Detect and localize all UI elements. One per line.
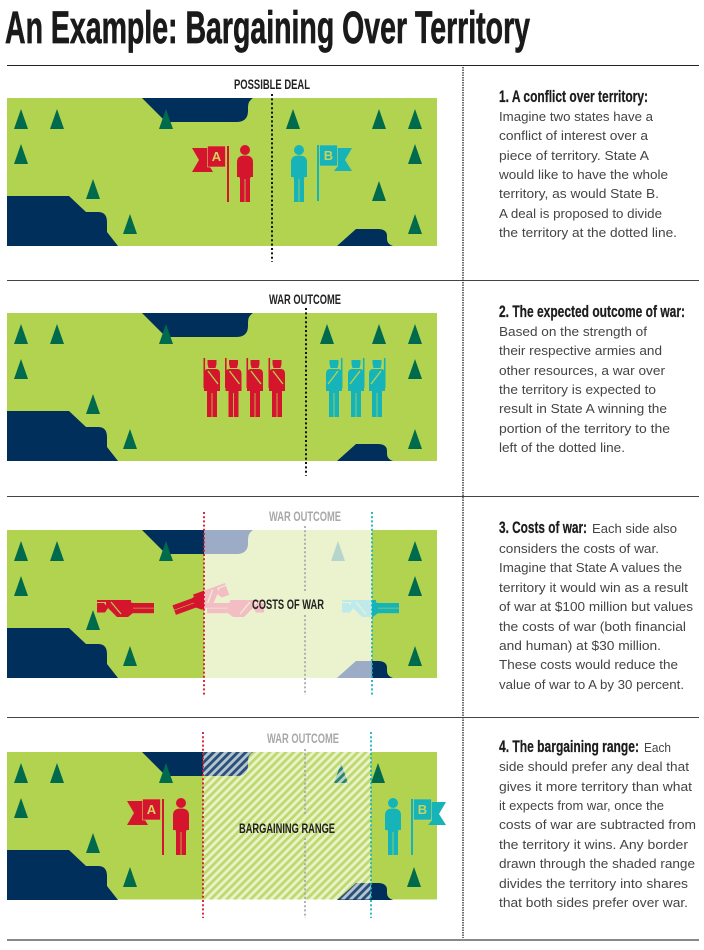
text block 4: costs of war are subtracted from <box>499 817 696 832</box>
map ground 3 <box>7 530 437 678</box>
text block 3: Imagine that State A values the <box>499 560 682 575</box>
flag A: A <box>212 149 222 164</box>
costs of war shaded range <box>204 530 372 678</box>
war outcome label: WAR OUTCOME <box>269 509 341 524</box>
text block 4: drawn through the shaded range <box>499 856 695 871</box>
text block 3: of war at $100 million but values <box>499 599 694 614</box>
text block 1: would like to have the whole <box>498 167 668 182</box>
trees 4 <box>14 763 421 887</box>
person B <box>385 798 401 855</box>
faded lakes inside range <box>204 530 372 678</box>
lakes 1 <box>7 98 393 246</box>
text block 1: conflict of interest over a <box>499 128 649 143</box>
trees 3 <box>14 541 422 666</box>
fallen soldiers <box>97 583 399 618</box>
text block 1: the territory at the dotted line. <box>499 225 677 240</box>
flag A <box>127 799 164 855</box>
text block 4 <box>499 737 696 910</box>
cyan soldiers <box>326 358 386 417</box>
text block 3: the costs of war (both financial <box>499 619 686 634</box>
cyan boundary <box>370 732 372 918</box>
flag A: A <box>147 802 157 817</box>
text block 1: territory, as would State B. <box>499 186 659 201</box>
lakes 3 <box>7 530 393 678</box>
bargaining range label: BARGAINING RANGE <box>239 821 335 836</box>
war outcome label: WAR OUTCOME <box>267 731 339 746</box>
map ground 2 <box>7 313 437 461</box>
text block 2: other resources, a war over <box>499 363 666 378</box>
text block 4: divides the territory into shares <box>499 876 689 891</box>
text block 1: 1. A conflict over territory: <box>499 87 648 106</box>
text block 3: 3. Costs of war: <box>499 518 587 537</box>
text block 4: Each <box>644 740 671 755</box>
lakes 4 <box>7 752 393 900</box>
panel 2: war outcome map <box>7 292 437 476</box>
map ground 1 <box>7 98 437 246</box>
possible deal dotted line <box>271 94 273 262</box>
text block 2: result in State A winning the <box>499 401 667 416</box>
war outcome dotted line <box>305 308 307 476</box>
text block 1 <box>498 87 677 240</box>
person B <box>291 145 307 202</box>
text block 2 <box>499 302 685 455</box>
flag B: B <box>418 802 427 817</box>
red soldiers <box>204 358 285 417</box>
text block 2: Based on the strength of <box>499 324 647 339</box>
cyan boundary <box>371 512 373 695</box>
text block 4: gives it more territory than what <box>499 779 692 794</box>
possible deal label: POSSIBLE DEAL <box>234 77 310 92</box>
flag B: B <box>324 148 333 163</box>
gray war outcome line <box>304 749 306 918</box>
trees 2 <box>14 324 422 449</box>
text block 4: that both sides prefer over war. <box>499 895 688 910</box>
text block 4: it expects from war, once the <box>499 798 664 813</box>
flag B <box>317 145 352 201</box>
text block 3: considers the costs of war. <box>499 541 659 556</box>
war outcome label: WAR OUTCOME <box>269 292 341 307</box>
text block 4: the territory it wins. Any border <box>499 837 689 852</box>
map ground 4 <box>7 752 437 900</box>
text block 1: Imagine two states have a <box>499 109 654 124</box>
panel 3: costs of war map <box>7 509 437 695</box>
text block 3: Each side also <box>592 521 677 536</box>
text block 2: portion of the territory to the <box>499 421 670 436</box>
text block 3 <box>499 518 694 692</box>
text block 3: and human) at $30 million. <box>499 638 661 653</box>
person A <box>237 145 253 202</box>
gray war outcome line <box>304 526 306 695</box>
trees 1 <box>14 109 422 234</box>
text block 3: territory it would win as a result <box>499 580 688 595</box>
lakes 2 <box>7 313 393 461</box>
bargaining range hatching <box>203 752 371 900</box>
person A <box>173 798 189 855</box>
text block 1: piece of territory. State A <box>499 148 649 163</box>
red boundary <box>203 512 205 695</box>
red boundary <box>202 732 204 918</box>
costs of war label: COSTS OF WAR <box>252 597 324 612</box>
text block 1: A deal is proposed to divide <box>499 206 662 221</box>
text block 3: These costs would reduce the <box>499 657 678 672</box>
panel 1: possible deal map <box>7 77 437 262</box>
text block 3: value of war to A by 30 percent. <box>499 677 684 692</box>
flag B <box>411 799 446 855</box>
panel 4: bargaining range map <box>7 731 446 918</box>
text block 2: their respective armies and <box>499 343 662 358</box>
flag A <box>192 146 229 202</box>
text block 4: side should prefer any deal that <box>499 759 689 774</box>
text block 2: left of the dotted line. <box>499 440 625 455</box>
text block 2: the territory is expected to <box>499 382 656 397</box>
text block 4: 4. The bargaining range: <box>499 737 639 756</box>
